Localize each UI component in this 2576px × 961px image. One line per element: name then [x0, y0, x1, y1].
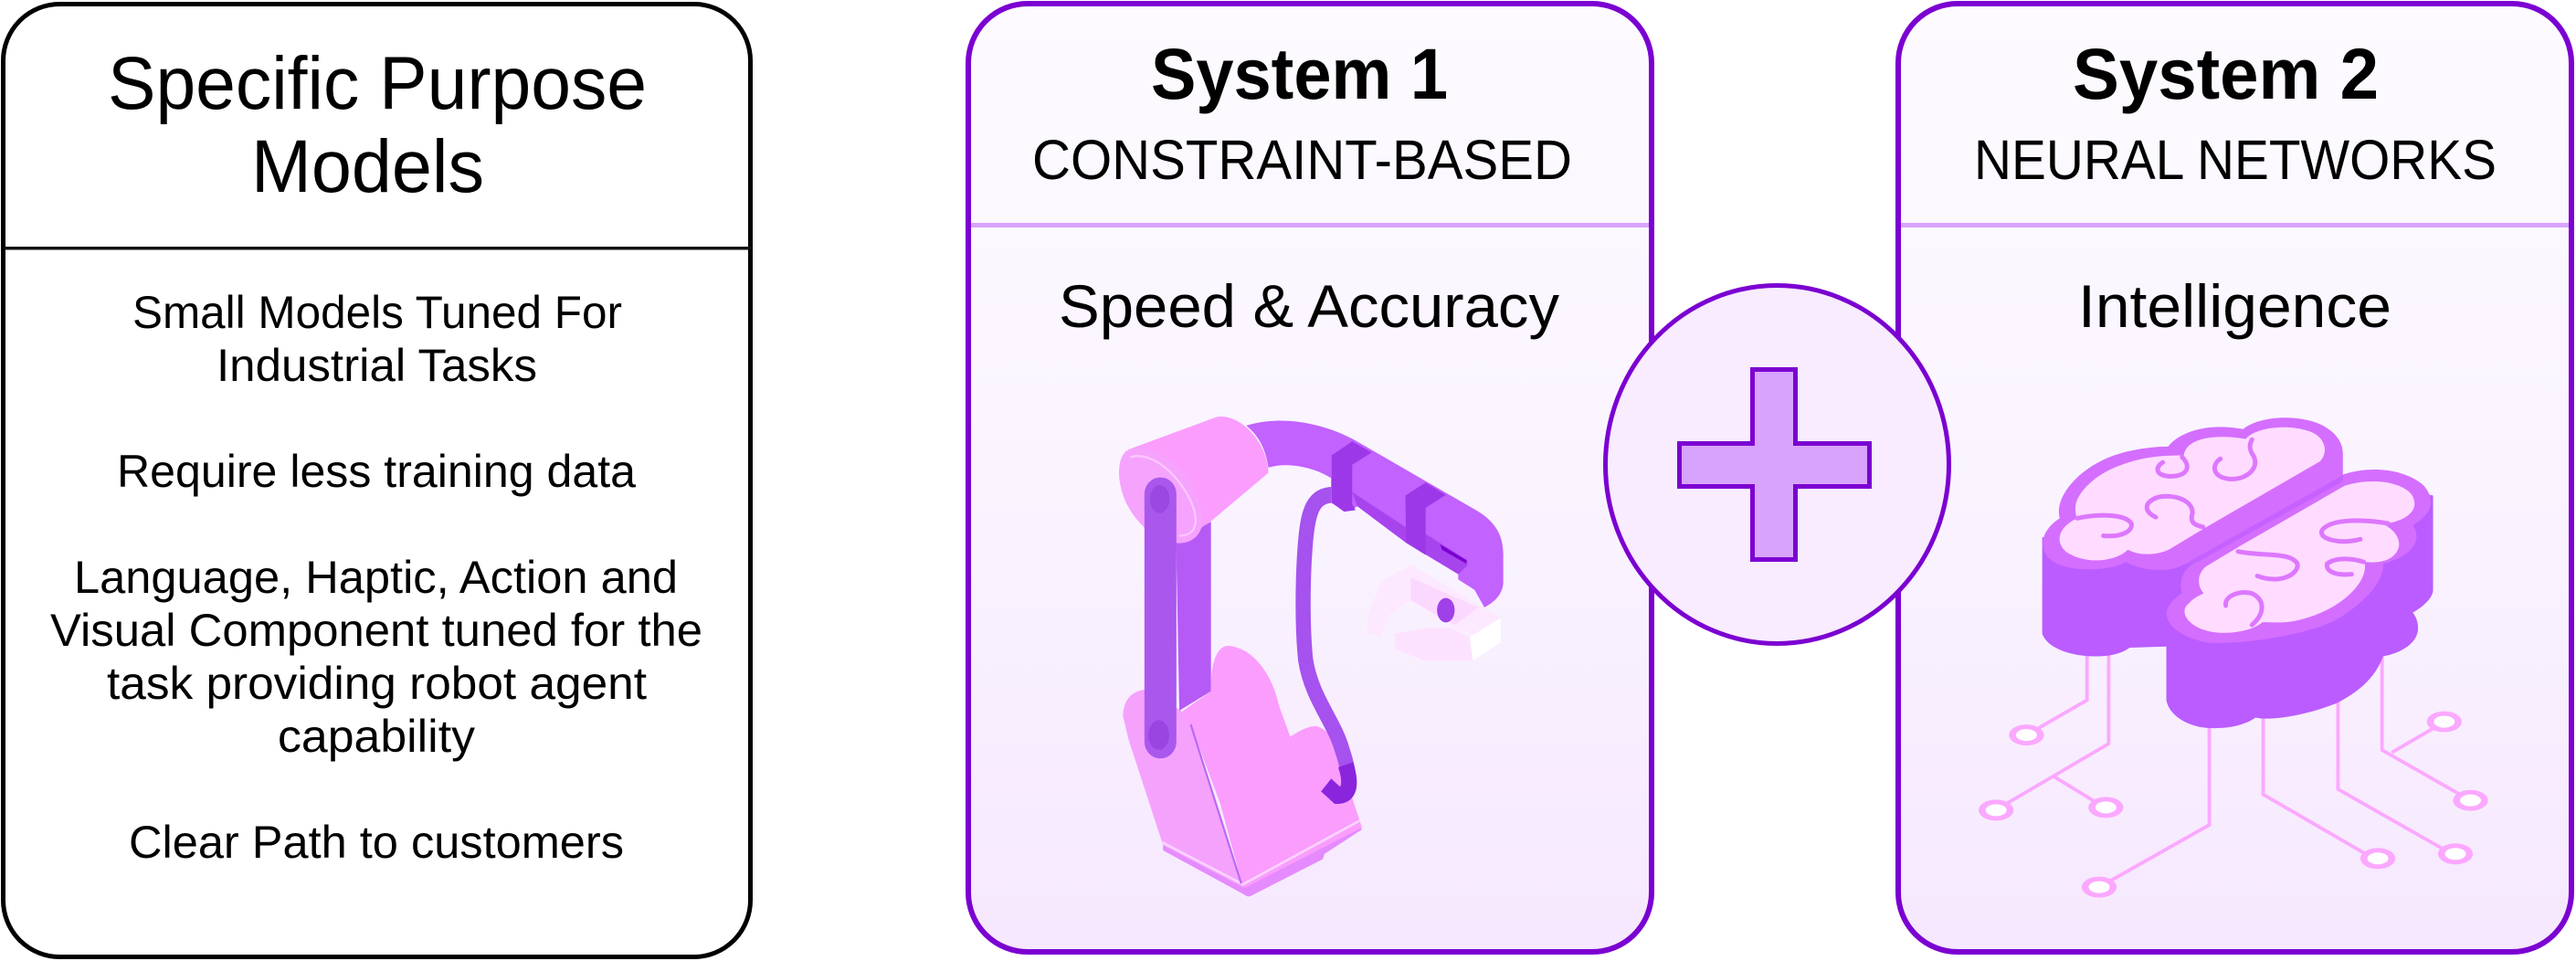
- plus badge: [1606, 285, 1949, 643]
- brain folds: [2077, 439, 2389, 625]
- shoulder end cap: [1119, 448, 1202, 544]
- robot base underside: [1163, 828, 1362, 896]
- subheading: constraint-based: CONSTRAINT-BASED: [1032, 129, 1572, 191]
- text block: components: Language, Haptic, Action and: [74, 552, 678, 603]
- heading: specific purpose models: Models: [251, 125, 484, 208]
- panel: system 2: [1898, 4, 2571, 952]
- robot base front: [1181, 646, 1362, 887]
- text block: training data: Require less training data: [117, 446, 636, 497]
- text block: customers: Clear Path to customers: [129, 817, 624, 868]
- gripper inner face: [1411, 577, 1478, 625]
- text block: components: [50, 552, 702, 762]
- text block: small models: Industrial Tasks: [216, 340, 537, 391]
- divider under heading: [1901, 223, 2569, 227]
- panel frame: [4, 4, 751, 957]
- circuit traces: [2007, 653, 2460, 882]
- text block: components: task providing robot agent: [107, 658, 647, 709]
- divider under heading: [971, 223, 1649, 227]
- arm collar far: [1406, 482, 1446, 555]
- base highlight: [1162, 820, 1360, 884]
- cable: [1304, 495, 1348, 796]
- panel: system 1: [968, 4, 1652, 952]
- panel frame: [1898, 4, 2571, 952]
- icon: plus: [1679, 369, 1869, 559]
- shoulder cylinder: [1129, 417, 1269, 541]
- cable end: [1326, 765, 1349, 796]
- text block: components: capability: [278, 711, 475, 762]
- left hemisphere surface: [2060, 428, 2325, 560]
- text block: components: Visual Component tuned for the: [50, 605, 702, 656]
- badge circle: [1606, 285, 1949, 643]
- subheading: neural networks: NEURAL NETWORKS: [1974, 129, 2497, 191]
- arm underside: [1352, 492, 1467, 575]
- icon: robot arm: [1119, 417, 1504, 896]
- gripper lower jaw: [1395, 628, 1473, 660]
- panel frame: [968, 4, 1652, 952]
- arm collar near: [1332, 441, 1372, 512]
- label: speed and accuracy: Speed & Accuracy: [1059, 272, 1559, 340]
- hemisphere gap: [2182, 475, 2343, 565]
- strap: [1145, 478, 1177, 758]
- circuit node centers: [1986, 716, 2481, 893]
- right hemisphere surface: [2184, 481, 2414, 633]
- panel: specific purpose models: [4, 4, 751, 957]
- right hemisphere rim: [2167, 470, 2431, 643]
- strap pin bottom: [1148, 721, 1169, 750]
- circuit nodes: [1979, 712, 2488, 898]
- heading: specific purpose models: [108, 42, 647, 208]
- heading: system 2: System 2: [2073, 33, 2379, 114]
- divider under heading: [4, 247, 751, 250]
- gripper upper jaw: [1367, 565, 1501, 637]
- icon: brain circuit: [1979, 417, 2488, 898]
- strap pin top: [1150, 485, 1169, 513]
- robot base side: [1123, 690, 1243, 887]
- heading: system 1: System 1: [1151, 33, 1448, 114]
- robot column: [1176, 522, 1211, 711]
- left hemisphere rim: [2043, 417, 2343, 570]
- base edge: [1191, 724, 1241, 883]
- shoulder ring: [1130, 456, 1196, 535]
- gripper lens: [1437, 598, 1454, 622]
- gripper tip: [1367, 581, 1389, 637]
- label: intelligence: Intelligence: [2078, 272, 2391, 340]
- gripper side: [1470, 618, 1501, 660]
- arm body: [1246, 421, 1504, 607]
- brain body: [2043, 475, 2433, 728]
- gripper: [1367, 565, 1501, 660]
- arm slit: [1441, 544, 1466, 564]
- text block: small models: [132, 287, 622, 391]
- text block: small models: Small Models Tuned For: [132, 287, 622, 338]
- heading: specific purpose models: Specific Purpose: [108, 42, 647, 125]
